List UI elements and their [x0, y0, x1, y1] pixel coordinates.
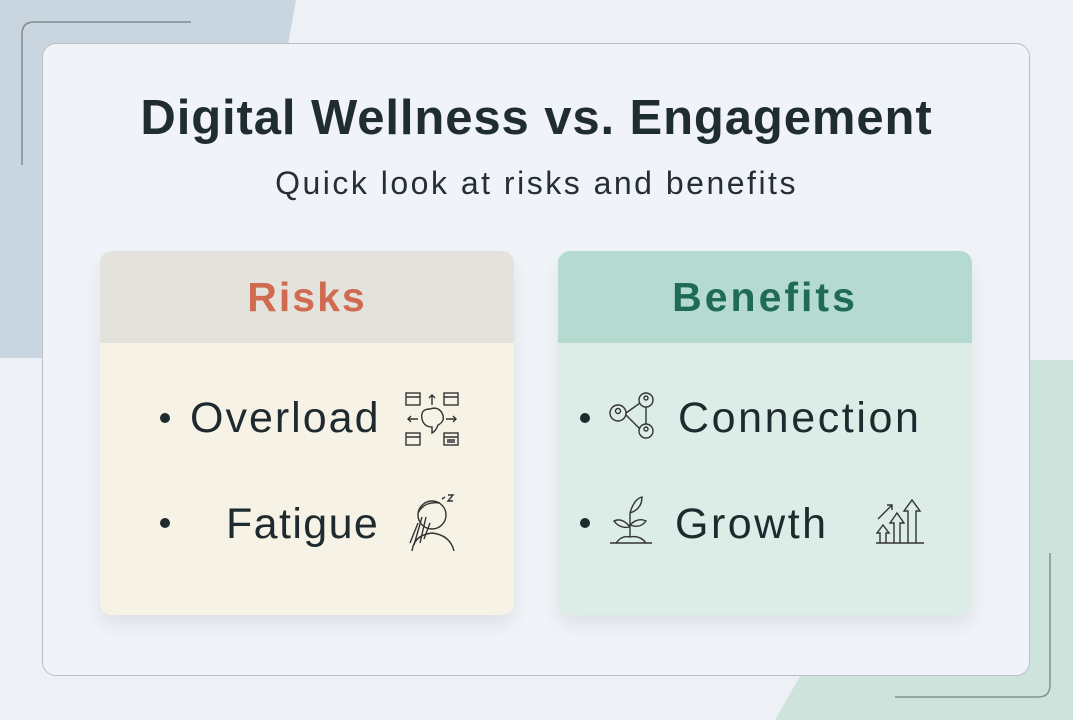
item: overload: Overload: [190, 394, 380, 442]
benefits header: [558, 251, 972, 343]
icon: growth arrows: [876, 498, 924, 544]
item: overload: [160, 392, 459, 446]
panel: risks: [100, 251, 514, 615]
panel: benefits: [558, 251, 972, 615]
benefits header: Benefits: [672, 274, 858, 320]
icon: people network: [609, 392, 654, 439]
item: growth: [580, 496, 924, 548]
item: growth: Growth: [675, 500, 829, 548]
item: connection: Connection: [678, 394, 922, 442]
risks header: [100, 251, 514, 343]
subtitle: Quick look at risks and benefits: [275, 165, 798, 201]
item: connection: [580, 392, 922, 442]
icon: sprout: [610, 496, 652, 544]
icon: tired person: [409, 494, 455, 552]
title: Digital Wellness vs. Engagement: [140, 91, 933, 145]
item: fatigue: Fatigue: [226, 500, 379, 548]
risks header: Risks: [247, 274, 367, 320]
item: fatigue: [160, 494, 455, 552]
icon: overload brain: [405, 392, 459, 446]
